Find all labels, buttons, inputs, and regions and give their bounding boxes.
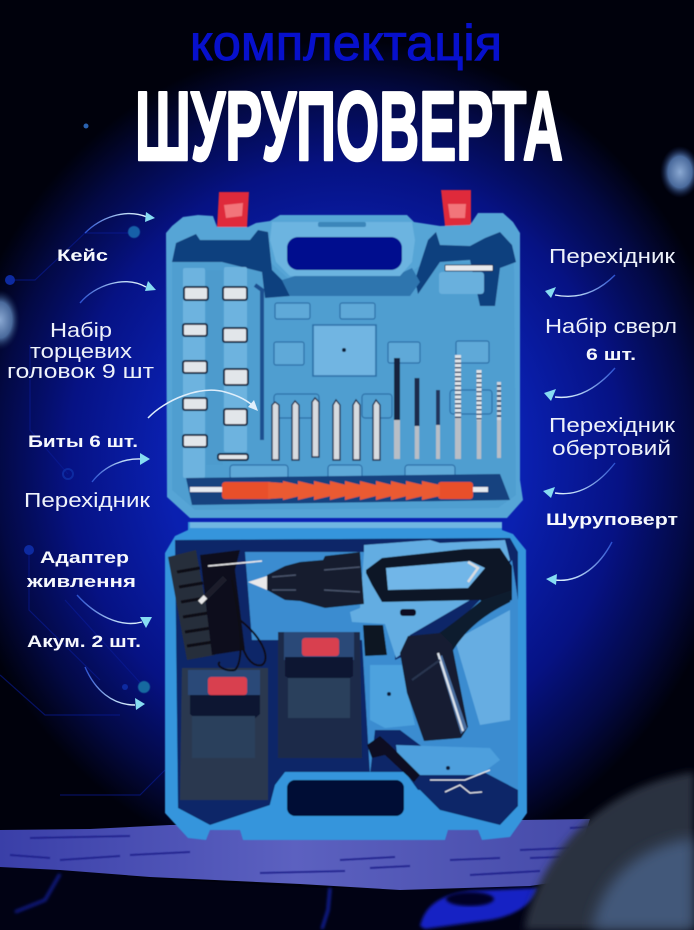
top rim bbox=[190, 522, 502, 528]
flexible shaft recess bbox=[186, 474, 510, 505]
label: Набір торцевих головок 9 шт: торцевих bbox=[30, 341, 132, 363]
arrow: адаптер bbox=[77, 595, 152, 628]
arrow: шуруповерт bbox=[546, 542, 612, 585]
arrow: Перехідник right bbox=[545, 275, 615, 298]
case shell bbox=[166, 213, 523, 518]
table wood grain bbox=[10, 827, 590, 875]
label: Перехідник right: Перехідник bbox=[549, 246, 675, 268]
label: Набір торцевих головок 9 шт bbox=[7, 320, 154, 383]
sockets bbox=[183, 287, 248, 460]
label: Перехідник обертовий: Перехідник bbox=[549, 415, 675, 437]
label: Акум. 2 шт.: Акум. 2 шт. bbox=[27, 632, 141, 651]
flexible shaft bbox=[190, 481, 488, 500]
bottom clip wire bbox=[430, 770, 490, 793]
arrow: сверла bbox=[544, 368, 615, 401]
handle band bbox=[270, 222, 415, 276]
label: Кейс: Кейс bbox=[57, 246, 108, 265]
bottom handle bbox=[262, 772, 430, 838]
label: Набір торцевих головок 9 шт: головок 9 шт bbox=[7, 361, 154, 383]
label: Набір сверл 6 шт. bbox=[545, 316, 677, 364]
table surface bbox=[0, 819, 590, 890]
dark interior bbox=[175, 538, 518, 825]
bits bbox=[272, 398, 380, 460]
label: Адаптер живлення: живлення bbox=[26, 572, 136, 591]
toolcase upper half bbox=[166, 190, 523, 518]
charger bbox=[168, 550, 266, 670]
neck bbox=[438, 590, 512, 652]
right recess bbox=[415, 232, 516, 306]
label: Шуруповерт: Шуруповерт bbox=[546, 510, 678, 529]
arrow: Кейс bbox=[85, 212, 155, 233]
labels and arrows bbox=[7, 212, 678, 710]
label: Набір сверл 6 шт.: Набір сверл bbox=[545, 316, 677, 338]
recess under handle bbox=[282, 268, 420, 296]
moulded panels bbox=[230, 303, 492, 479]
drill bbox=[248, 540, 512, 741]
label: Набір торцевих головок 9 шт: Набір bbox=[50, 320, 112, 342]
label: Перехідник обертовий: обертовий bbox=[552, 438, 671, 460]
left recess bbox=[172, 230, 290, 298]
arrow: Перехідник left bbox=[92, 453, 150, 482]
arrow: Биты bbox=[148, 390, 258, 418]
toolcase lower half bbox=[165, 522, 527, 840]
big foreground ball bbox=[524, 772, 694, 930]
batteries bbox=[180, 632, 362, 800]
handle slot bbox=[318, 222, 366, 227]
top adapter bit bbox=[439, 265, 493, 294]
case shell bbox=[165, 522, 527, 840]
arrow: обертовий bbox=[543, 463, 615, 498]
red latches bbox=[217, 190, 471, 228]
label: Перехідник left: Перехідник bbox=[24, 490, 150, 512]
label: Адаптер живлення bbox=[26, 548, 136, 591]
label: Биты 6 шт.: Биты 6 шт. bbox=[28, 432, 138, 451]
interior floor bbox=[172, 262, 516, 510]
left socket columns bbox=[183, 267, 262, 478]
body light panel bbox=[350, 540, 510, 658]
grip bbox=[400, 633, 468, 741]
arrow: акум bbox=[85, 667, 145, 710]
heading: комплектація: комплектація bbox=[190, 15, 502, 71]
label: Перехідник обертовий bbox=[549, 415, 675, 460]
black frame bbox=[366, 548, 512, 606]
strap bbox=[367, 736, 420, 782]
handle hole bbox=[287, 780, 404, 816]
drill tray floor bbox=[245, 552, 518, 790]
label: Адаптер живлення: Адаптер bbox=[40, 548, 129, 567]
chuck bbox=[267, 552, 364, 608]
handle hole bbox=[287, 237, 402, 270]
label: Набір сверл 6 шт.: 6 шт. bbox=[586, 345, 636, 364]
arrow: набір головок bbox=[80, 281, 156, 303]
drills bbox=[397, 355, 499, 459]
trigger bbox=[363, 625, 387, 656]
